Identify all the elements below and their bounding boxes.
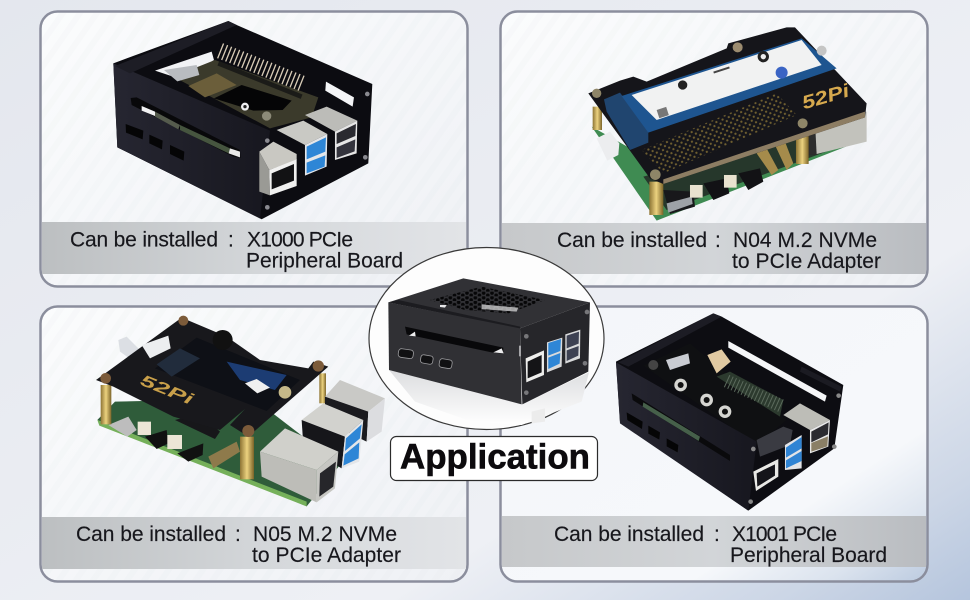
image: N04 adapter on Raspberry Pi: 52Pi: [799, 79, 853, 113]
caption text: :: [714, 523, 720, 546]
caption text: to PCIe Adapter: [732, 250, 881, 273]
caption text: N05 M.2 NVMe: [253, 523, 397, 546]
panel: X1000 PCIe Peripheral Board: [40, 12, 468, 286]
caption text: [554, 523, 887, 567]
caption text: to PCIe Adapter: [252, 544, 401, 567]
panel: X1001 PCIe Peripheral Board: [500, 306, 928, 582]
image: case with X1001 board: [616, 313, 843, 511]
caption text: :: [228, 228, 234, 252]
center ellipse: assembled case: [369, 248, 604, 430]
caption text: [76, 523, 401, 567]
caption text: Peripheral Board: [730, 544, 887, 567]
image: N05 adapter on Raspberry Pi: 52Pi: [138, 372, 196, 409]
caption text: X1000 PCIe: [247, 228, 353, 252]
caption band: [502, 223, 926, 274]
caption text: Can be installed: [554, 523, 704, 546]
image: N05 adapter on Raspberry Pi: [96, 316, 385, 506]
caption band: [42, 222, 466, 274]
caption band: [502, 516, 926, 567]
icon: closed aluminium case: [388, 278, 590, 425]
caption text: X1001 PCIe: [732, 523, 837, 546]
caption text: Peripheral Board: [246, 250, 403, 272]
caption text: :: [235, 523, 241, 546]
caption text: Can be installed: [70, 228, 218, 252]
caption text: [557, 229, 881, 273]
image: N04 adapter on Raspberry Pi: [588, 27, 867, 221]
panel: N04 M.2 NVMe to PCIe Adapter: [500, 12, 928, 286]
caption text: Can be installed: [76, 523, 226, 546]
image: case with X1000 board: [113, 21, 372, 219]
caption text: N04 M.2 NVMe: [733, 229, 877, 252]
heading: Application: Application: [400, 438, 590, 476]
caption text: [70, 228, 403, 272]
caption text: :: [715, 229, 721, 252]
panel: N05 M.2 NVMe to PCIe Adapter: [40, 306, 468, 582]
caption band: [42, 517, 466, 569]
caption text: Can be installed: [557, 229, 707, 252]
